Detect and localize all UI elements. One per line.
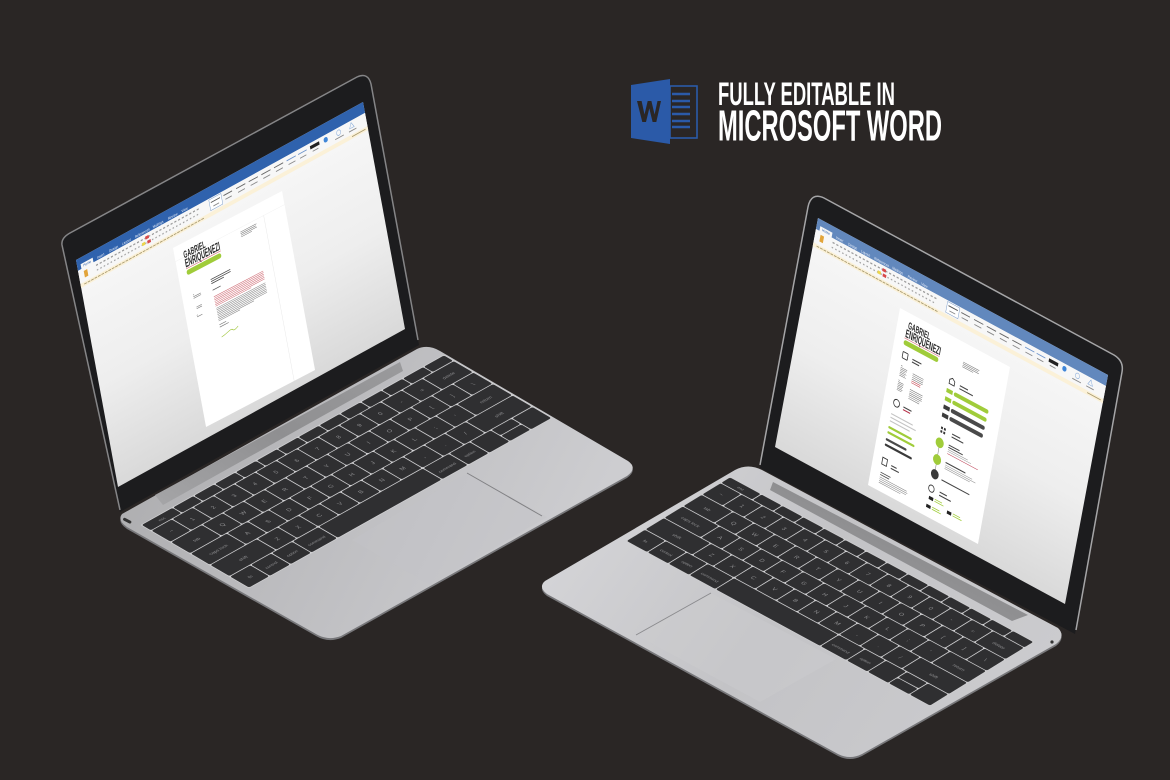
highlighted paragraph <box>214 271 265 306</box>
base: right laptop <box>542 466 1062 759</box>
Word tabs: Review <box>168 212 178 221</box>
Word tabs: References <box>874 256 890 268</box>
Word tabs: Layout <box>861 249 870 258</box>
Word tabs: Design <box>848 242 858 251</box>
icon: Microsoft Word <box>631 79 697 144</box>
Word tabs: Review <box>907 274 918 284</box>
green title bar <box>186 253 222 275</box>
section: profile <box>896 351 928 405</box>
key labels: left laptop: control <box>263 561 279 569</box>
section: timeline <box>929 425 982 500</box>
key labels: left laptop: command <box>306 535 327 547</box>
key labels: left laptop: tab <box>192 536 202 542</box>
key labels: left laptop: shift <box>493 411 506 418</box>
resume name: GABRIEL <box>907 319 931 342</box>
heading: Fully editable in Microsoft Word <box>718 76 942 151</box>
section: experience bars <box>942 376 991 439</box>
key labels: right laptop: command <box>699 572 721 583</box>
lid: right laptop <box>760 196 1122 634</box>
key labels: right laptop: ~1234567890-= <box>717 493 977 634</box>
Word tabs: View <box>921 282 928 289</box>
key labels: right laptop: option <box>680 560 695 568</box>
Word tabs: View <box>181 206 188 214</box>
key labels: right laptop: command <box>830 643 852 655</box>
key labels: right laptop: delete <box>991 641 1007 650</box>
key labels: left laptop: esc <box>157 516 167 522</box>
key labels: right laptop: QWERTYUIOP[]\ <box>729 521 988 662</box>
resume name <box>905 318 943 359</box>
screen: right laptop, Word window <box>775 218 1108 604</box>
signature <box>221 326 239 337</box>
key labels: right laptop: fn <box>641 539 649 544</box>
heading: Fully editable in Microsoft Word: FULLY EDITABLE IN <box>718 76 895 112</box>
green title bar <box>903 339 939 363</box>
side labels <box>193 291 205 317</box>
document: cover letter page <box>173 191 315 427</box>
base: left laptop <box>120 347 633 640</box>
Word tabs: Insert <box>97 252 105 260</box>
keyboard: left laptop <box>140 355 553 588</box>
key labels: right laptop <box>641 483 1022 697</box>
key labels: right laptop: shift <box>671 533 683 540</box>
laptop: right, resume <box>542 196 1122 759</box>
key labels: left laptop: QWERTYUIOP[]\ <box>219 382 478 528</box>
screen: left laptop, Word window <box>76 102 405 487</box>
key labels: left laptop: ~1234567890-= <box>168 388 428 534</box>
key labels: left laptop: delete <box>441 371 457 380</box>
Word tabs: References <box>135 227 150 239</box>
resume name: ENRIQUENEZI <box>184 240 221 271</box>
recipient text <box>211 269 231 284</box>
key labels: left laptop: fn <box>246 574 255 579</box>
contact text <box>240 224 257 237</box>
heading: Fully editable in Microsoft Word: MICROSOFT WORD <box>718 103 942 151</box>
key labels: left laptop: return <box>478 395 494 404</box>
contact text <box>962 362 979 375</box>
key labels: left laptop: option <box>285 549 300 557</box>
resume name: ENRIQUENEZI <box>905 327 942 359</box>
Word tabs: Home <box>83 259 91 268</box>
Word tabs: Home <box>822 228 830 236</box>
key labels: right laptop: esc <box>736 486 746 491</box>
resume name: GABRIEL <box>182 238 206 261</box>
key labels: left laptop: option <box>463 449 478 458</box>
section: logos <box>925 484 965 525</box>
body paragraph <box>216 283 268 321</box>
key labels: left laptop: caps lock <box>208 543 230 556</box>
key labels: left laptop: ZXCVBNM,./ <box>274 432 470 542</box>
Word tabs: Mailings <box>892 266 903 276</box>
Word tabs: Layout <box>122 237 131 246</box>
Word tabs: Insert <box>836 235 844 244</box>
Word tabs: Mailings <box>152 219 164 229</box>
section: skills bars <box>885 398 921 460</box>
key labels: right laptop: shift <box>928 673 940 680</box>
key labels: left laptop: ASDFGHJKL;' <box>244 415 460 536</box>
section: references <box>878 457 911 497</box>
key labels: left laptop: command <box>437 461 458 473</box>
key labels: right laptop: control <box>659 548 674 557</box>
key labels: right laptop: tab <box>702 506 713 512</box>
key labels: left laptop: shift <box>237 555 250 562</box>
key labels: right laptop: return <box>951 663 967 672</box>
key labels: right laptop: ASDFGHJKL;' <box>715 536 932 654</box>
key labels: right laptop: caps lock <box>680 516 702 528</box>
document: resume page <box>868 308 1010 544</box>
lid: left laptop <box>62 76 419 512</box>
Word tabs: Design <box>109 244 119 253</box>
key labels: left laptop <box>153 362 537 580</box>
sign-off <box>219 320 229 327</box>
key labels: right laptop: ZXCVBNM,./ <box>707 553 903 660</box>
laptop: left, cover letter <box>62 76 633 640</box>
keyboard: right laptop <box>625 477 1035 706</box>
key labels: right laptop: option <box>858 657 873 665</box>
